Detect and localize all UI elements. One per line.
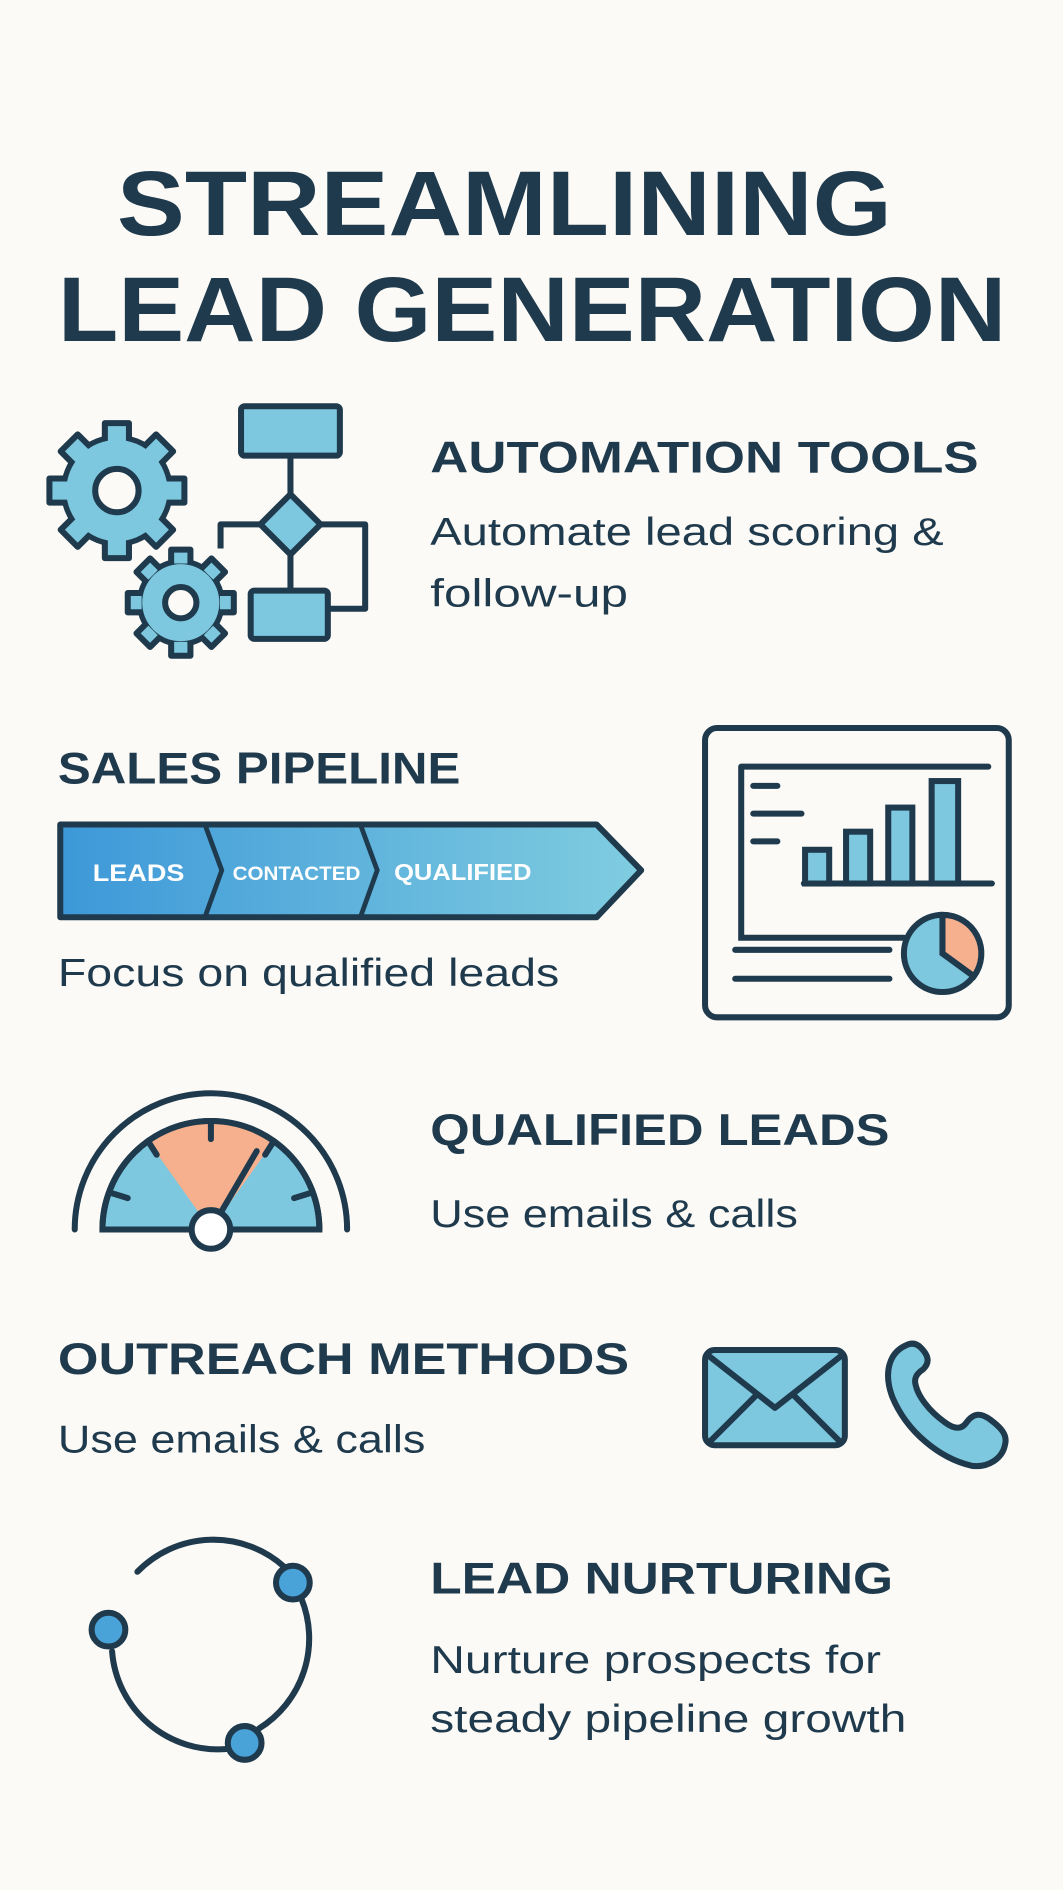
text: pipeline: Focus on qualified leads <box>58 952 559 995</box>
icon: dashboard <box>705 728 1009 1017</box>
heading: sales pipeline: SALES PIPELINE <box>58 744 460 793</box>
text: nurturing: steady pipeline growth <box>430 1698 906 1741</box>
pipeline arrow: LEADS <box>93 860 184 887</box>
title: STREAMLINING <box>117 153 892 255</box>
heading: lead nurturing: LEAD NURTURING <box>430 1554 893 1603</box>
title: LEAD GENERATION <box>58 259 1006 361</box>
icon: gears and flowchart <box>49 406 365 656</box>
title <box>58 153 1006 361</box>
heading: automation tools: AUTOMATION TOOLS <box>430 433 979 483</box>
icon: envelope <box>705 1350 845 1445</box>
icon: phone <box>888 1344 1006 1466</box>
text: automation: follow-up <box>430 572 628 615</box>
heading: qualified leads: QUALIFIED LEADS <box>430 1106 889 1155</box>
text: nurturing: Nurture prospects for <box>430 1639 881 1682</box>
icon: gauge <box>75 1093 347 1249</box>
pipeline arrow: CONTACTED <box>233 864 360 885</box>
text: automation: Automate lead scoring & <box>430 511 944 554</box>
pipeline arrow <box>60 824 641 917</box>
text: nurturing <box>430 1639 906 1741</box>
icon: nurturing cycle <box>92 1540 310 1760</box>
heading: outreach methods: OUTREACH METHODS <box>58 1335 629 1384</box>
text: outreach: Use emails & calls <box>58 1418 425 1461</box>
text: qualified: Use emails & calls <box>430 1193 798 1236</box>
pipeline arrow: QUALIFIED <box>394 859 532 885</box>
text: automation <box>430 511 944 615</box>
